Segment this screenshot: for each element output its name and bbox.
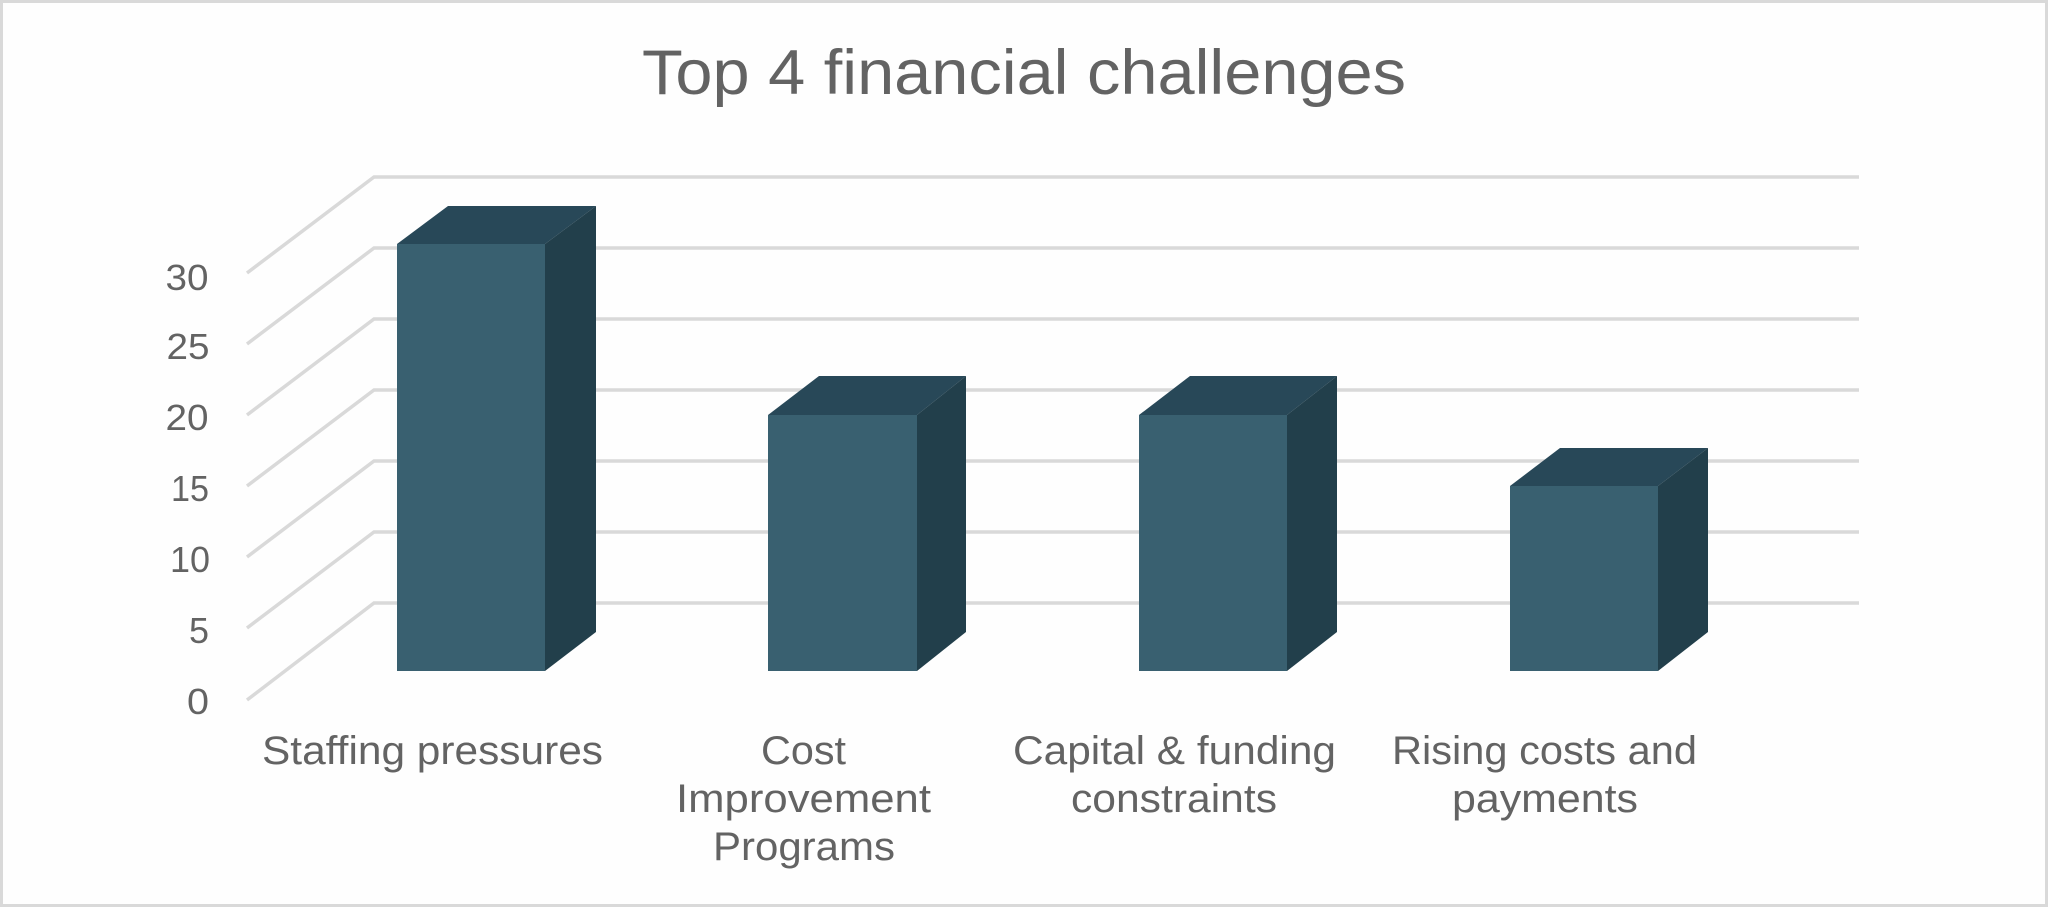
y axis labels: 10 <box>170 539 210 580</box>
category label: Cost Improvement Programs: Cost <box>761 729 846 773</box>
y axis labels: 5 <box>189 610 209 651</box>
y axis labels: 30 <box>166 257 208 298</box>
y axis labels <box>166 257 210 722</box>
category label: Staffing pressures: Staffing pressures <box>262 729 603 773</box>
y axis labels: 25 <box>166 326 210 367</box>
category label: Rising costs and payments: payments <box>1452 777 1638 821</box>
category label: Capital & funding constraints <box>1013 729 1336 821</box>
bar: Staffing pressures <box>397 206 596 671</box>
category label: Capital & funding constraints: constraints <box>1071 777 1277 821</box>
bar: Capital & funding constraints <box>1139 376 1337 671</box>
gridlines <box>247 177 1859 700</box>
bar: Rising costs and payments <box>1510 448 1708 671</box>
y axis labels: 20 <box>166 397 208 438</box>
category label: Rising costs and payments: Rising costs and <box>1392 729 1697 773</box>
category label: Cost Improvement Programs: Improvement <box>676 777 931 821</box>
y axis labels: 15 <box>171 468 209 509</box>
y axis labels: 0 <box>187 681 209 722</box>
title: Top 4 financial challenges <box>642 38 1406 108</box>
category label: Cost Improvement Programs <box>676 729 931 869</box>
category label: Rising costs and payments <box>1392 729 1697 821</box>
bar: Cost Improvement Programs <box>768 376 966 671</box>
category label: Capital & funding constraints: Capital & funding <box>1013 729 1336 773</box>
category label: Cost Improvement Programs: Programs <box>713 825 895 869</box>
